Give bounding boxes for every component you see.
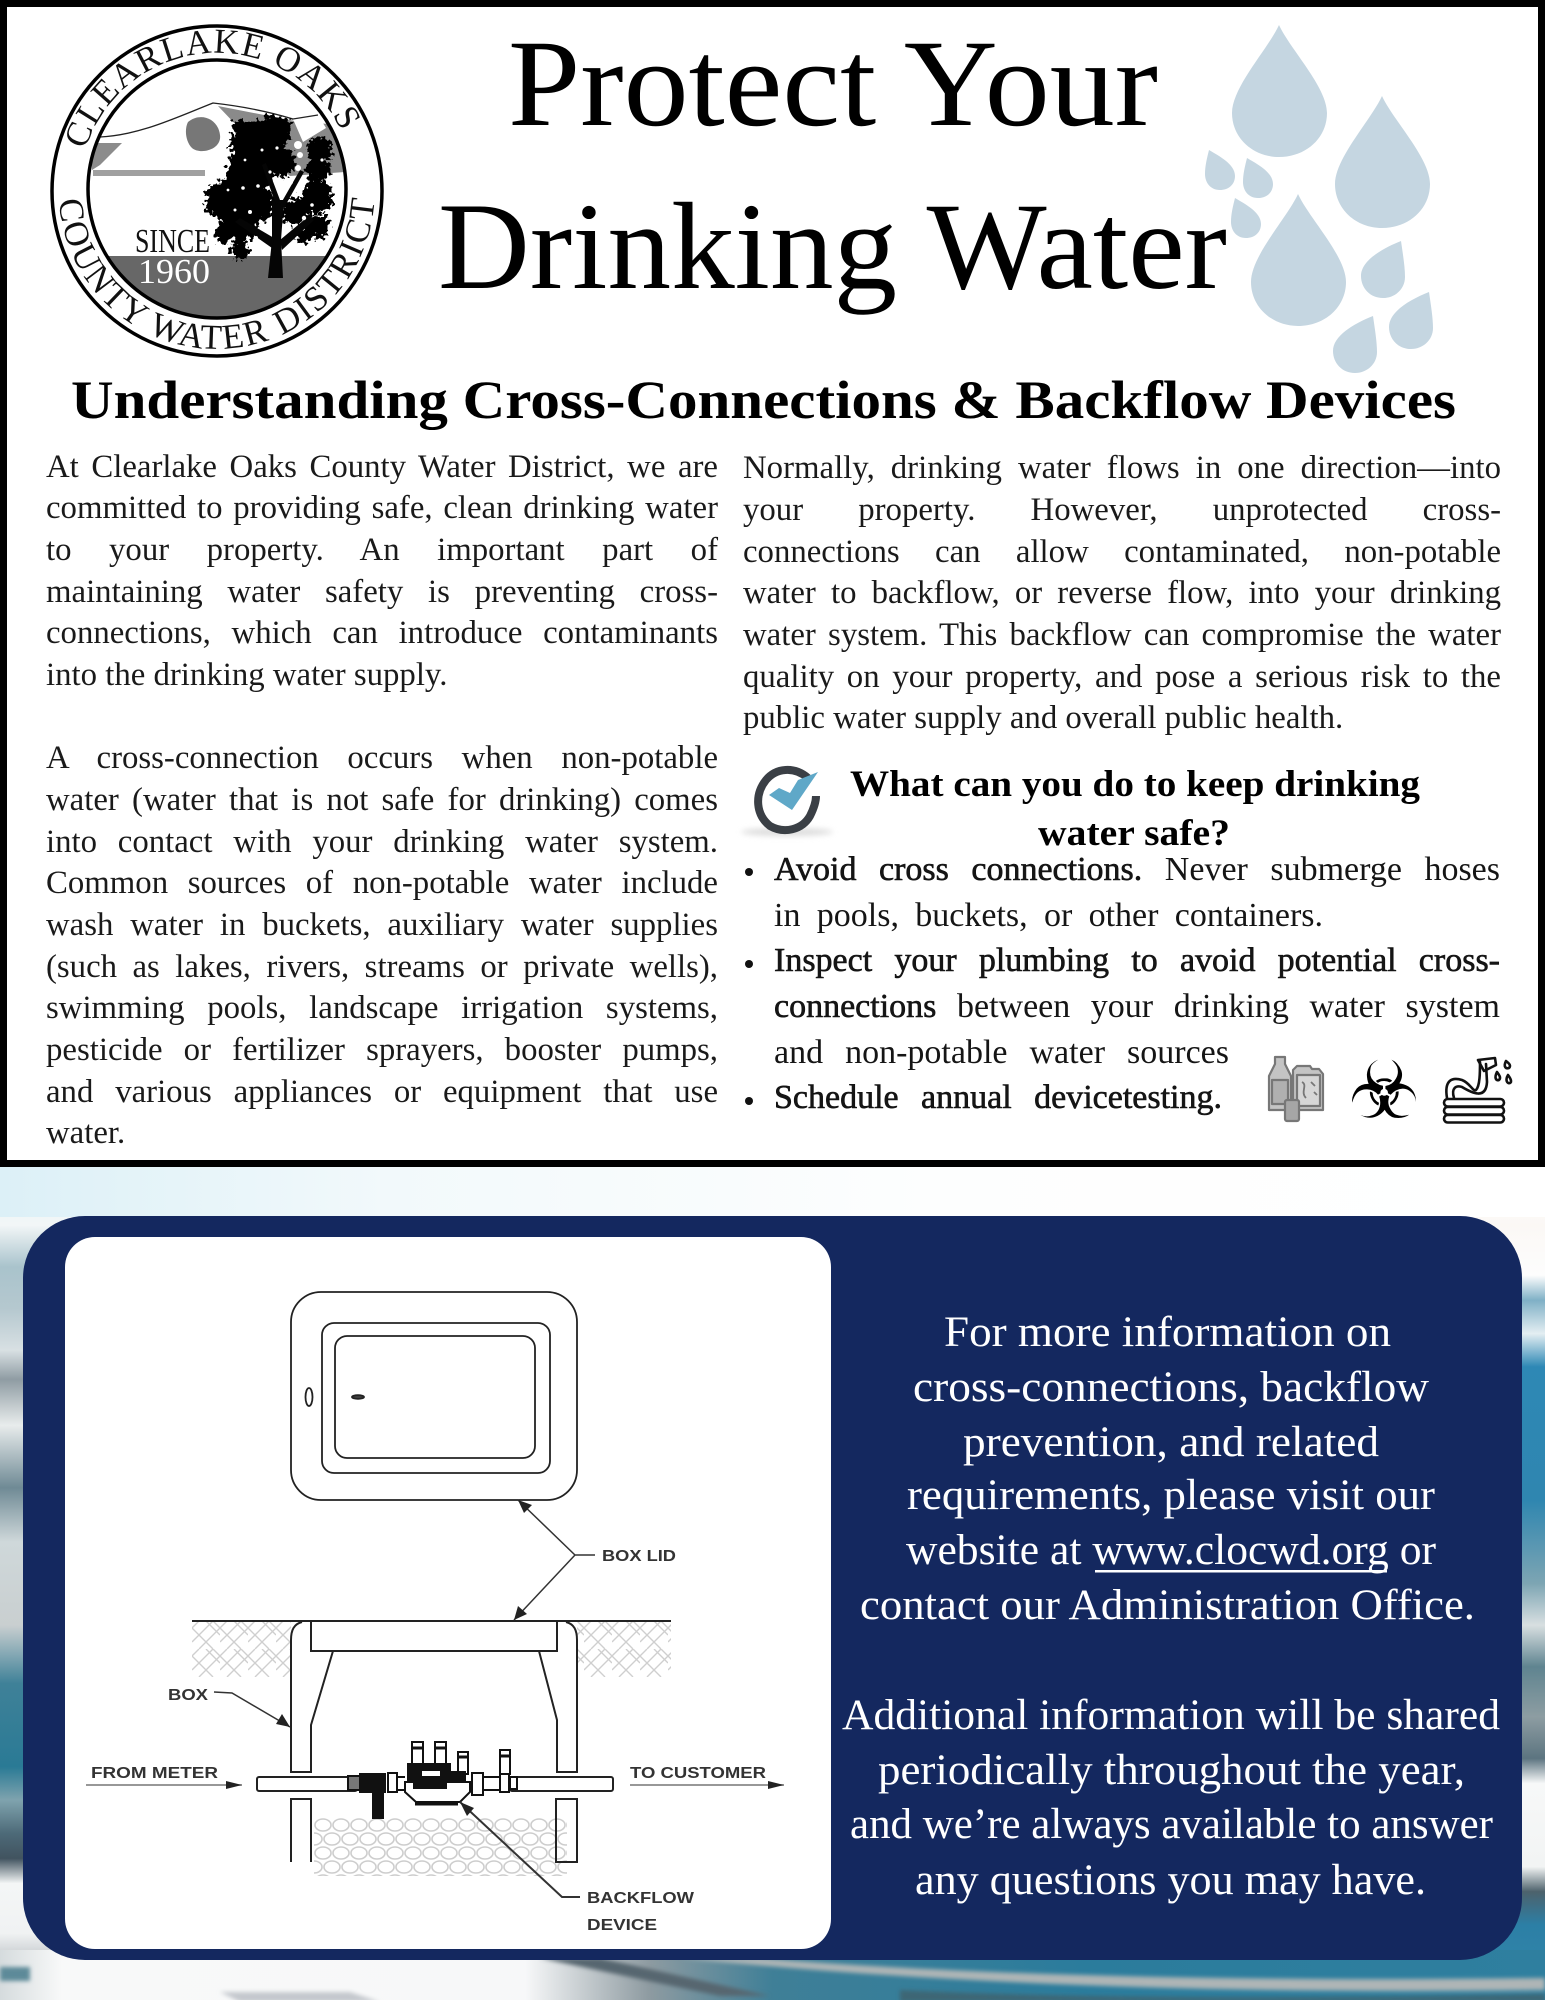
title: Drinking Water — [438, 178, 1227, 315]
text block: more information: prevention, and related — [963, 1419, 1379, 1466]
text block: intro and cross-connection definition: swimming pools, landscape irrigation systems, — [46, 990, 718, 1026]
text block: backflow explanation: Normally, drinking water flows in one direction—into — [743, 450, 1501, 486]
text block: intro and cross-connection definition: water. — [46, 1115, 125, 1151]
logo: Clearlake Oaks County Water District seal: COUNTY WATER DISTRICT — [60, 198, 374, 349]
white framed top section — [0, 0, 1545, 1167]
box lid top view — [291, 1292, 577, 1500]
icon: biohazard symbol: ☣ — [1348, 1044, 1420, 1137]
icon: chemical containers — [1268, 1056, 1324, 1122]
text block: intro and cross-connection definition: Common sources of non-potable water include — [46, 865, 718, 901]
text block: backflow explanation: public water supply and overall public health. — [743, 700, 1343, 736]
text block: intro and cross-connection definition: pesticide or fertilizer sprayers, booster pumps, — [46, 1032, 718, 1068]
bullet list: Avoid cross connections. Never submerge hoses — [774, 851, 1500, 888]
logo: Clearlake Oaks County Water District seal: 1960 — [138, 252, 210, 291]
section view of box and ground — [192, 1621, 671, 1876]
diagram labels: BACKFLOW — [587, 1890, 694, 1907]
text block: intro and cross-connection definition — [46, 449, 718, 1151]
bullet list: Inspect your plumbing to avoid potential cross- — [774, 942, 1500, 979]
text block: more information: contact our Administration Office. — [860, 1582, 1475, 1629]
text block: backflow explanation: your property. However, unprotected cross- — [743, 492, 1501, 528]
text block: intro and cross-connection definition: to your property. An important part of — [46, 532, 718, 568]
bullet list: in pools, buckets, or other containers. — [774, 897, 1323, 934]
text block: intro and cross-connection definition: wash water in buckets, auxiliary water supplies — [46, 907, 718, 943]
diagram labels: BOX LID — [602, 1548, 676, 1565]
text block: intro and cross-connection definition: connections, which can introduce contaminants — [46, 615, 718, 651]
backflow device — [348, 1742, 517, 1818]
text block: more information: periodically throughout the year, — [878, 1747, 1465, 1794]
subtitle: Understanding Cross-Connections & Backflow Devices — [71, 370, 1456, 430]
text block: intro and cross-connection definition: water (water that is not safe for drinking) comes — [46, 782, 718, 818]
leader lines and arrowheads — [86, 1500, 784, 1897]
text block: intro and cross-connection definition: into the drinking water supply. — [46, 657, 447, 693]
icon: water drops — [1205, 25, 1433, 373]
text block: backflow explanation: quality on your property, and pose a serious risk to the — [743, 659, 1501, 695]
bullet list — [745, 851, 1500, 1116]
logo: Clearlake Oaks County Water District seal — [50, 24, 384, 358]
bullet list: Schedule annual devicetesting. — [774, 1079, 1222, 1116]
text block: intro and cross-connection definition: (such as lakes, rivers, streams or private wells), — [46, 949, 718, 985]
heading: what can you do: What can you do to keep drinking — [850, 764, 1421, 805]
text block: backflow explanation: water to backflow, or reverse flow, into your drinking — [743, 575, 1501, 611]
text block: intro and cross-connection definition: At Clearlake Oaks County Water District, we are — [46, 449, 718, 485]
text block: backflow explanation: connections can allow contaminated, non-potable — [743, 534, 1501, 570]
panel: white diagram card — [65, 1237, 831, 1949]
logo ring text: CLEARLAKE OAKS — [67, 30, 360, 146]
diagram labels — [91, 1548, 766, 1934]
title: Protect Your — [508, 15, 1158, 152]
text block: intro and cross-connection definition: into contact with your drinking water system. — [46, 824, 718, 860]
text block: backflow explanation — [743, 450, 1501, 736]
title — [438, 15, 1227, 315]
logo: Clearlake Oaks County Water District seal: SINCE — [135, 223, 210, 260]
text block: more information: Additional information will be shared — [842, 1692, 1500, 1739]
diagram labels: DEVICE — [587, 1917, 657, 1934]
heading: what can you do — [850, 764, 1421, 854]
text block: backflow explanation: water system. This backflow can compromise the water — [743, 617, 1501, 653]
text block: more information: website at www.clocwd.org or — [906, 1527, 1436, 1574]
text block: more information: For more information on — [944, 1309, 1391, 1356]
panel: navy information panel — [23, 1216, 1522, 1960]
icon: check mark in ring — [742, 766, 832, 838]
text block: intro and cross-connection definition: A cross-connection occurs when non-potable — [46, 740, 718, 776]
text block: more information: any questions you may have. — [915, 1857, 1426, 1904]
heading: what can you do: water safe? — [1038, 813, 1230, 854]
text block: intro and cross-connection definition: and various appliances or equipment that use — [46, 1074, 718, 1110]
text block: intro and cross-connection definition: maintaining water safety is preventing cross- — [46, 574, 718, 610]
text block: more information: cross-connections, backflow — [913, 1364, 1429, 1411]
text block: more information: and we’re always available to answer — [850, 1801, 1493, 1848]
text block: more information: requirements, please visit our — [907, 1472, 1435, 1519]
diagram labels: FROM METER — [91, 1765, 218, 1782]
diagram labels: BOX — [168, 1687, 209, 1704]
diagram labels: TO CUSTOMER — [630, 1765, 766, 1782]
icon: garden hose — [1442, 1056, 1512, 1124]
bullet list: connections between your drinking water system — [774, 988, 1500, 1025]
text block: intro and cross-connection definition: committed to providing safe, clean drinking water — [46, 490, 718, 526]
bullet list: and non-potable water sources — [774, 1034, 1229, 1071]
